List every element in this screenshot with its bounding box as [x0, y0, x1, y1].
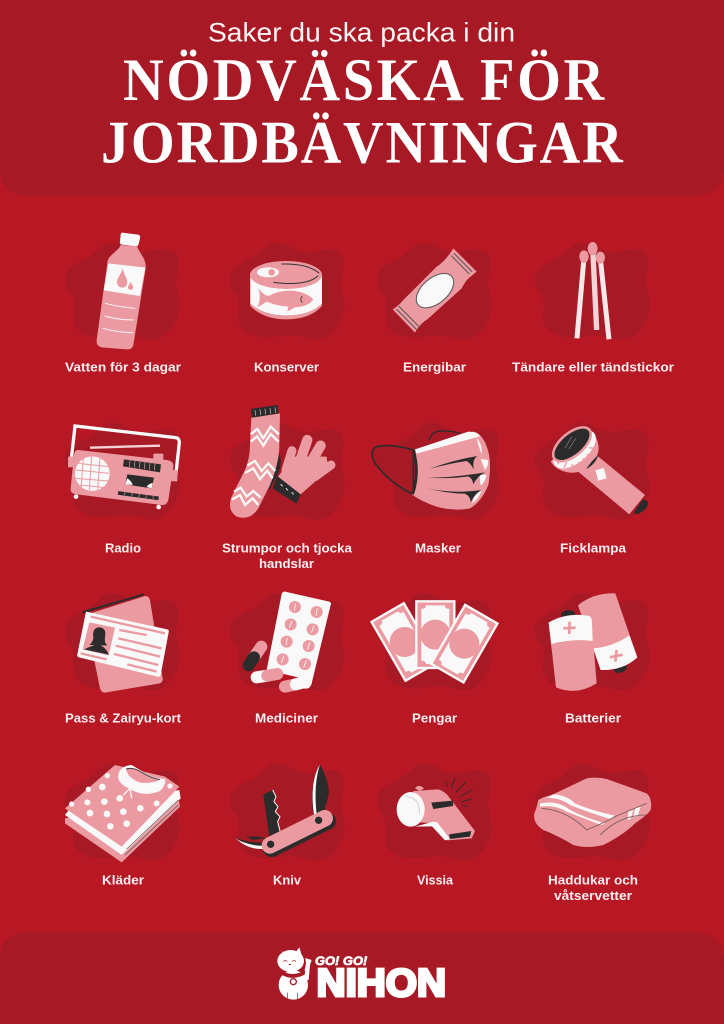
label: våtservetter [554, 888, 632, 903]
icon: face mask [372, 431, 490, 510]
label: Masker [415, 540, 461, 556]
header band [0, 0, 724, 196]
label [548, 872, 638, 903]
label: handslar [259, 556, 314, 571]
icon: energy bar [393, 248, 477, 333]
icon: folded towel [534, 778, 651, 847]
icon: matches [577, 242, 609, 339]
label [222, 540, 353, 571]
icon: folded clothes [65, 765, 181, 862]
item: matches [512, 242, 674, 374]
item: socks and gloves [222, 405, 353, 571]
icon: passport and residence card [77, 594, 169, 693]
icon: sock and glove [230, 405, 331, 518]
icon: lucky cat [277, 947, 312, 1000]
icon: banknotes [371, 601, 497, 682]
title: JORDBÄVNINGAR [101, 109, 624, 176]
label: Vatten för 3 dagar [65, 360, 181, 374]
item: water [65, 233, 181, 374]
label: Kläder [102, 872, 144, 888]
icon: can [250, 261, 322, 319]
item: masks [372, 423, 500, 556]
item: money [371, 594, 497, 726]
item: flashlight [535, 419, 650, 556]
item: canned food [230, 243, 345, 374]
item: whistle [377, 764, 492, 888]
label: Pengar [412, 710, 457, 726]
label: Strumpor och tjocka [222, 540, 353, 556]
label: Batterier [565, 710, 621, 726]
label: Haddukar och [548, 872, 638, 888]
item: radio [65, 423, 180, 556]
item: medicine [230, 592, 345, 726]
icon: radio [68, 426, 179, 509]
label: Tändare eller tändstickor [512, 360, 674, 374]
logo [277, 947, 446, 1005]
item: knife [230, 764, 345, 888]
icon: pills [249, 592, 331, 689]
subtitle: Saker du ska packa i din [208, 18, 515, 48]
label: Energibar [403, 360, 466, 374]
wordmark: NIHON [317, 962, 446, 1005]
title [101, 46, 624, 176]
item: passport and card [65, 594, 182, 726]
item: clothes [65, 764, 181, 888]
footer band [0, 932, 724, 1024]
item: towels [534, 764, 651, 903]
label: Konserver [254, 360, 319, 374]
icon: batteries [549, 593, 637, 691]
item: batteries [535, 593, 650, 726]
label: Vissia [417, 872, 454, 888]
title: NÖDVÄSKA FÖR [123, 46, 605, 113]
item: energy bar [377, 243, 492, 374]
icon: pocket knife [234, 764, 329, 849]
label: Kniv [273, 872, 302, 888]
wordmark: GO! GO! [315, 954, 367, 968]
label: Radio [105, 540, 141, 556]
icon: whistle [397, 778, 475, 840]
label: Pass & Zairyu-kort [65, 710, 182, 726]
label: Ficklampa [560, 540, 627, 556]
icon: water bottle [97, 233, 146, 349]
icon: flashlight [545, 419, 648, 514]
label: Mediciner [255, 710, 318, 726]
